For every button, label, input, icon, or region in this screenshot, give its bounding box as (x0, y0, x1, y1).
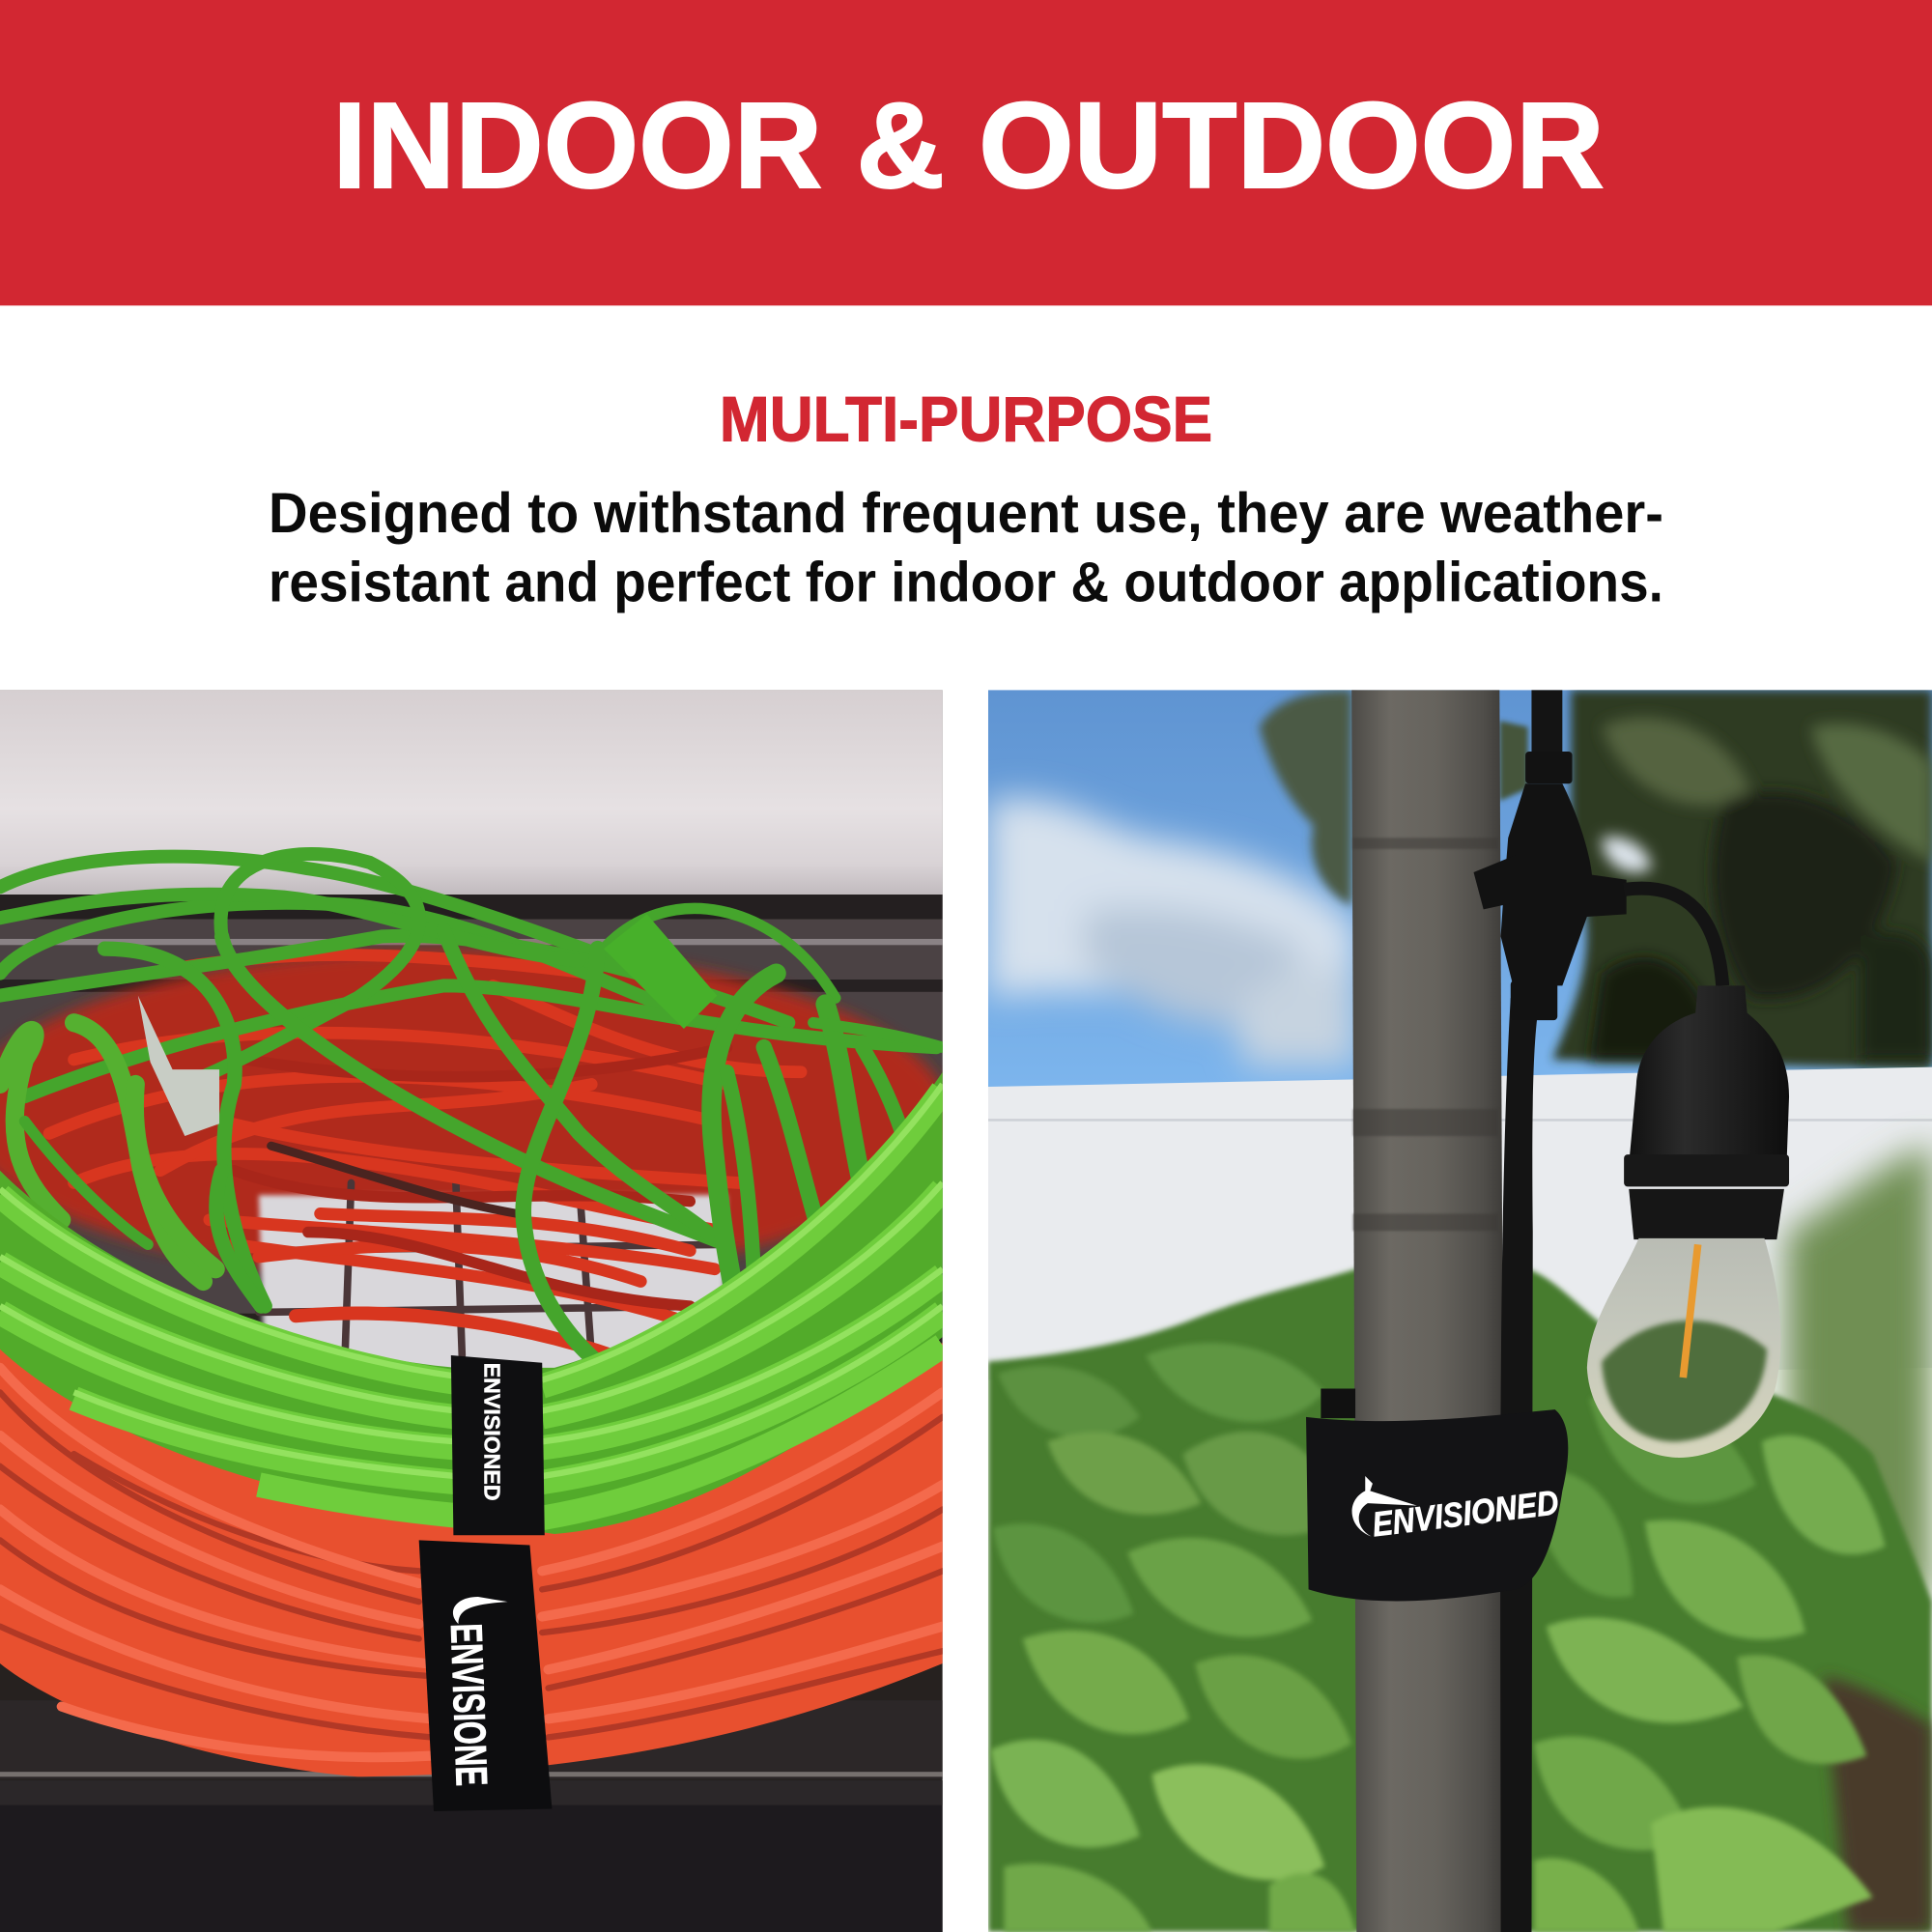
subheading: MULTI-PURPOSE (720, 384, 1212, 456)
panel: outdoor photo of strap on pole (988, 690, 1932, 1932)
shelf rails (0, 1700, 943, 1779)
bulb socket (1624, 985, 1789, 1239)
thin green cords (0, 854, 943, 1368)
green plug (604, 914, 717, 1029)
panel: indoor photo of coiled extension cords (0, 690, 949, 1932)
cord connector (1474, 752, 1627, 1020)
green cord coil (0, 1072, 943, 1534)
white fence (988, 1067, 1932, 1380)
tape tag (138, 996, 219, 1136)
brand text: ENVISIONED (1370, 1483, 1561, 1545)
wire rack (0, 895, 943, 1314)
header banner (0, 0, 1932, 305)
bulb wire (1624, 889, 1722, 985)
body text (269, 482, 1663, 613)
background trees (1260, 690, 1932, 1069)
ivy foliage (988, 1269, 1932, 1932)
sky (988, 690, 1932, 1096)
pole markings (1351, 838, 1491, 1233)
red cords tangle (0, 949, 949, 1386)
glass bulb (1587, 1238, 1780, 1458)
body text: resistant and perfect for indoor & outdoor applications. (269, 551, 1663, 613)
strap on orange coil: ENVISIONE (441, 1623, 497, 1787)
logo swoosh (1352, 1476, 1417, 1537)
background shrub (1786, 1146, 1932, 1602)
orange cord coil (0, 1343, 943, 1776)
body text: Designed to withstand frequent use, they are weather- (269, 482, 1663, 545)
strap on green coil (451, 1355, 545, 1535)
metal pole (1351, 690, 1506, 1932)
title: INDOOR & OUTDOOR (332, 77, 1605, 213)
black cord (1500, 690, 1562, 1932)
shelf front (0, 1780, 943, 1932)
hook-and-loop strap on pole (1306, 1389, 1568, 1601)
strap on green coil: ENVISIONED (479, 1363, 504, 1501)
wall (0, 690, 943, 907)
clouds (988, 799, 1355, 1065)
strap on orange coil (419, 1540, 552, 1811)
